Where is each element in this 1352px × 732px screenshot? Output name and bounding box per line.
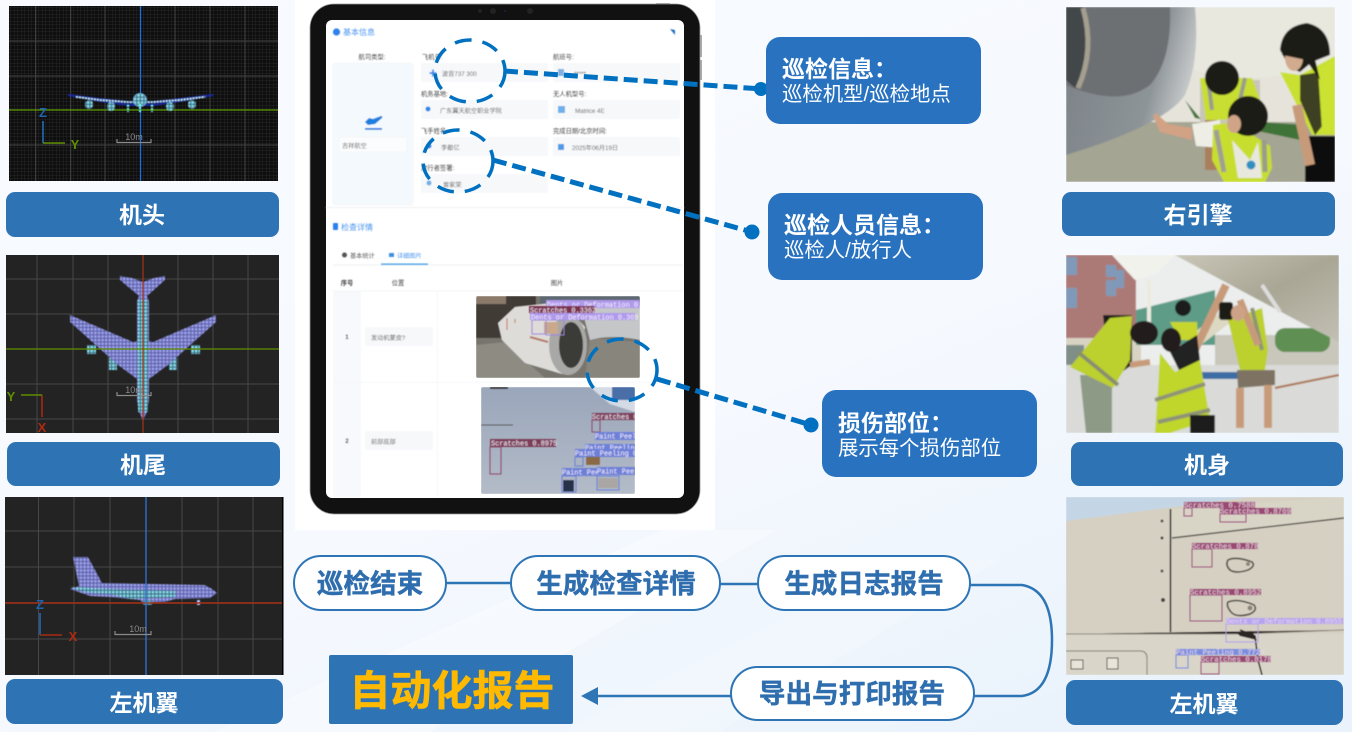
axis legend: Z — [36, 597, 44, 612]
detection boxes: Paint Peeling 0. — [575, 450, 641, 458]
label: right engine: 右引擎 — [1164, 202, 1232, 228]
person: back — [1200, 78, 1260, 120]
form fields: ✚ — [429, 69, 437, 78]
label: nose — [6, 192, 279, 237]
damage photo 2: fuselage — [481, 387, 649, 494]
flow step: export and print report — [731, 667, 974, 720]
section heading: inspection details: 检查详情 — [341, 222, 373, 232]
detection boxes: Scratches 0.8 — [592, 414, 646, 422]
detection boxes — [1176, 502, 1343, 674]
arrow head — [581, 687, 598, 705]
label: tail: 机尾 — [120, 452, 166, 478]
axis legend — [7, 385, 151, 435]
axis legend: X — [69, 629, 78, 644]
detection boxes: Scratches 0.8975 — [491, 440, 557, 448]
flow step: generate inspection details: 生成检查详情 — [536, 569, 696, 599]
section heading: basic info — [333, 27, 375, 37]
callout connector: inspector info — [423, 130, 760, 240]
flow step: generate inspection details — [511, 556, 720, 610]
detection boxes — [490, 413, 649, 492]
axis legend: Y — [71, 137, 80, 152]
detection boxes — [529, 300, 646, 335]
label: left wing (right column) — [1066, 680, 1343, 725]
detection boxes: Dents or Deformation 0.8 — [547, 302, 646, 310]
axis legend: X — [38, 420, 47, 435]
form fields: 完成日期/北京时间: — [553, 126, 607, 135]
screen: basic info form — [326, 27, 684, 497]
panel: tablet report screenshot — [295, 0, 715, 530]
airline card — [333, 52, 413, 205]
table: 位置 — [392, 278, 404, 287]
form fields: 飞手姓名: — [421, 126, 448, 135]
panel: tail top view — [6, 255, 279, 435]
callout: inspection info: 巡检机型/巡检地点 — [782, 83, 951, 106]
form fields: ***** — [574, 71, 587, 78]
panel: right engine photo — [1066, 7, 1335, 182]
detection boxes: Scratches 0.8952 — [1190, 590, 1261, 598]
plane top view — [70, 276, 216, 420]
section heading: basic info: 基本信息 — [343, 27, 375, 37]
form fields: 李都亿 — [441, 144, 460, 152]
person: centre — [1195, 285, 1226, 350]
table: 图片 — [551, 278, 563, 287]
label: tail — [7, 442, 280, 486]
detection boxes: Scratches 0.7588 — [1184, 502, 1255, 510]
form fields: 波音737 300 — [442, 70, 477, 78]
detection boxes: Paint Peeling — [595, 434, 649, 442]
form fields — [421, 52, 680, 193]
form fields: 放行者签署: — [421, 163, 454, 172]
tabs: 基本统计 — [350, 252, 375, 260]
axis legend: Y — [7, 389, 16, 404]
callout: inspector info: 巡检人/放行人 — [784, 239, 912, 262]
airline card: 吉祥航空 — [342, 142, 367, 150]
table: 发动机蒙皮? — [371, 334, 406, 342]
form fields: 曾家荣 — [443, 181, 462, 189]
panel: left wing damage photo — [1066, 497, 1344, 675]
panel: left view nose 3D grid — [9, 6, 278, 181]
callout: inspector info — [768, 193, 983, 280]
form fields: 广东翼天航空职业学院 — [440, 107, 502, 115]
detection boxes: Paint Peeling — [585, 445, 639, 453]
label: right engine — [1062, 192, 1335, 236]
callout connector: damage location — [587, 339, 818, 432]
person: front — [1192, 120, 1222, 148]
person: left — [1080, 375, 1112, 433]
form fields: 机务基地: — [421, 89, 448, 98]
tabs: 详细图片 — [397, 252, 422, 260]
axis legend: 10m — [125, 385, 143, 395]
flow step: inspection complete: 巡检结束 — [317, 569, 423, 599]
flow step: export and print report: 导出与打印报告 — [759, 679, 945, 709]
table: 2 — [345, 438, 349, 445]
detection boxes: Paint Peeli — [597, 468, 642, 476]
table — [333, 278, 683, 497]
table: 前部底部 — [371, 438, 396, 446]
form fields: 无人机型号: — [553, 89, 586, 98]
callout: damage location: 展示每个损伤部位 — [838, 437, 1001, 460]
flow step: generate log report: 生成日志报告 — [784, 569, 944, 599]
form fields: 航班号: — [553, 52, 574, 61]
axis legend — [39, 105, 151, 152]
form fields: 2025年06月19日 — [572, 144, 618, 152]
plane side view — [70, 557, 217, 605]
callout: inspector info: 巡检人员信息： — [784, 212, 945, 238]
label: left wing — [6, 679, 283, 724]
panel: left wing side view — [5, 497, 284, 675]
callout: damage location: 损伤部位： — [838, 410, 953, 436]
result box: automated report — [329, 655, 573, 724]
label: fuselage: 机身 — [1184, 452, 1230, 478]
flow step: generate log report — [758, 556, 970, 610]
airline card: 航司类型: — [359, 52, 386, 61]
result box: automated report: 自动化报告 — [350, 668, 554, 714]
callout: damage location — [822, 390, 1037, 477]
flow connectors — [446, 583, 1052, 696]
label: left wing: 左机翼 — [110, 690, 178, 716]
detection boxes: Scratches 0.8769 — [1220, 508, 1291, 516]
tabs — [333, 252, 683, 265]
table: 序号 — [341, 278, 353, 287]
detection boxes: Scratches 0.8178 — [1201, 656, 1272, 664]
detection boxes: Dents or Deformation 0.369 — [531, 314, 639, 322]
plane front view — [68, 94, 213, 112]
detection boxes: Scratches 0.878 — [1192, 544, 1259, 552]
callout connector: inspection info — [435, 40, 768, 102]
callout: inspection info: 巡检信息： — [782, 56, 897, 82]
detection boxes: Dents or Deformation 0.8955 — [1226, 618, 1342, 626]
tablet device frame — [310, 3, 702, 514]
detection boxes: Paint Peeling 0.7728 — [1176, 650, 1265, 658]
axis legend: 10m — [129, 624, 147, 634]
person: right — [1237, 370, 1275, 388]
detection boxes: Scratches 0.3362 — [530, 308, 596, 316]
damage photo 1: engine — [476, 296, 646, 378]
label: nose: 机头 — [119, 202, 165, 228]
panel: fuselage photo — [1066, 255, 1339, 433]
axis legend: Z — [39, 105, 47, 120]
label: fuselage — [1071, 442, 1343, 486]
form fields: 飞机号: — [422, 52, 443, 61]
axis legend — [36, 597, 151, 644]
callout: inspection info — [766, 37, 981, 124]
flow step: inspection complete — [294, 556, 446, 610]
form fields: Matrice 4E — [575, 108, 605, 115]
person: back — [1170, 322, 1198, 340]
person: right — [1280, 56, 1335, 135]
table: 1 — [345, 334, 349, 341]
axis legend: 10m — [125, 132, 143, 142]
detection boxes: Paint Pee — [562, 470, 599, 478]
label: left wing (right column): 左机翼 — [1170, 691, 1238, 717]
